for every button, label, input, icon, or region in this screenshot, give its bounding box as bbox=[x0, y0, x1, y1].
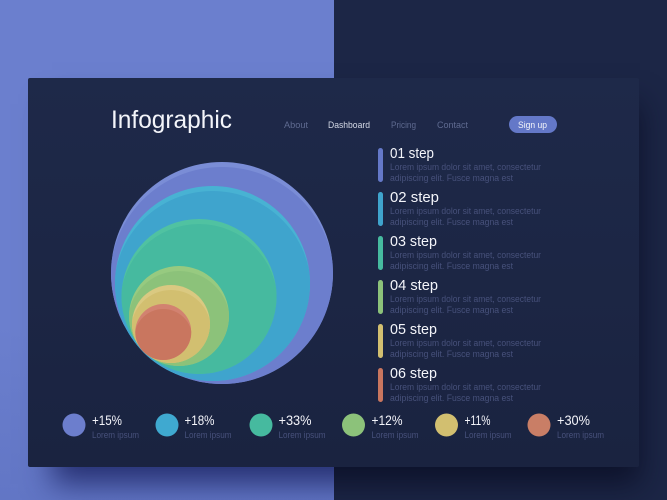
stat +18%: Lorem ipsum bbox=[184, 430, 232, 440]
step 03: 03 step bbox=[390, 233, 437, 250]
stat +33%: +33% bbox=[278, 412, 312, 428]
step 04: 04 step bbox=[390, 277, 438, 294]
circle 2: blue bbox=[114, 186, 311, 388]
circle 4: light green bbox=[128, 266, 230, 373]
step 04 bbox=[378, 277, 541, 315]
step 05 bbox=[378, 321, 541, 359]
stat +11%: Lorem ipsum bbox=[464, 430, 512, 440]
stat +15%: +15% bbox=[92, 412, 122, 428]
step 06: Lorem ipsum dolor sit amet, consectetur bbox=[390, 382, 541, 392]
circle 5: yellow bbox=[132, 285, 210, 363]
circle 6: red bbox=[135, 304, 192, 360]
sign up button: Sign up bbox=[518, 120, 547, 131]
step 05: Lorem ipsum dolor sit amet, consectetur bbox=[390, 338, 541, 348]
step 03: adipiscing elit. Fusce magna est bbox=[390, 261, 513, 271]
step 01: Lorem ipsum dolor sit amet, consectetur bbox=[390, 162, 541, 172]
sign up button bbox=[509, 116, 557, 133]
step 02: Lorem ipsum dolor sit amet, consectetur bbox=[390, 206, 541, 216]
step 06 bbox=[378, 365, 541, 403]
step 05: adipiscing elit. Fusce magna est bbox=[390, 349, 513, 359]
title: Infographic bbox=[111, 106, 232, 134]
stat +18% bbox=[156, 412, 232, 440]
navigation: Contact bbox=[437, 120, 468, 131]
stat +12% bbox=[342, 412, 418, 440]
stat +12%: +12% bbox=[372, 412, 402, 428]
navigation: About bbox=[284, 120, 308, 131]
step 01: adipiscing elit. Fusce magna est bbox=[390, 173, 513, 183]
stat +30%: Lorem ipsum bbox=[557, 430, 604, 440]
background: left blue panel bbox=[0, 0, 334, 500]
stat +15% bbox=[62, 412, 139, 440]
step 02 bbox=[378, 189, 541, 227]
stat +11%: +11% bbox=[464, 412, 490, 428]
stats row bbox=[62, 412, 604, 440]
nested circles chart bbox=[110, 162, 334, 391]
circle 3: teal bbox=[120, 219, 278, 381]
navigation: Dashboard bbox=[328, 120, 370, 131]
step 03 bbox=[378, 233, 541, 271]
stat +30% bbox=[528, 412, 604, 440]
navigation bbox=[284, 120, 468, 131]
stat +15%: Lorem ipsum bbox=[92, 430, 139, 440]
stat +33%: Lorem ipsum bbox=[278, 430, 326, 440]
background: right navy panel bbox=[334, 0, 667, 500]
step 05: 05 step bbox=[390, 321, 437, 338]
step 02: adipiscing elit. Fusce magna est bbox=[390, 217, 513, 227]
stat +11% bbox=[435, 412, 512, 440]
step 04: Lorem ipsum dolor sit amet, consectetur bbox=[390, 294, 541, 304]
step 06: adipiscing elit. Fusce magna est bbox=[390, 393, 513, 403]
infographic card layer bbox=[28, 78, 639, 467]
main card bbox=[28, 78, 639, 467]
step 01: 01 step bbox=[390, 145, 434, 162]
circle 1: purple bbox=[110, 162, 334, 391]
step 02: 02 step bbox=[390, 189, 439, 206]
step 01 bbox=[378, 145, 541, 183]
step 04: adipiscing elit. Fusce magna est bbox=[390, 305, 513, 315]
stat +12%: Lorem ipsum bbox=[372, 430, 418, 440]
steps list bbox=[378, 145, 541, 403]
stat +33% bbox=[250, 412, 326, 440]
navigation: Pricing bbox=[391, 120, 416, 131]
step 06: 06 step bbox=[390, 365, 437, 382]
stat +18%: +18% bbox=[184, 412, 214, 428]
step 03: Lorem ipsum dolor sit amet, consectetur bbox=[390, 250, 541, 260]
stat +30%: +30% bbox=[557, 412, 590, 428]
